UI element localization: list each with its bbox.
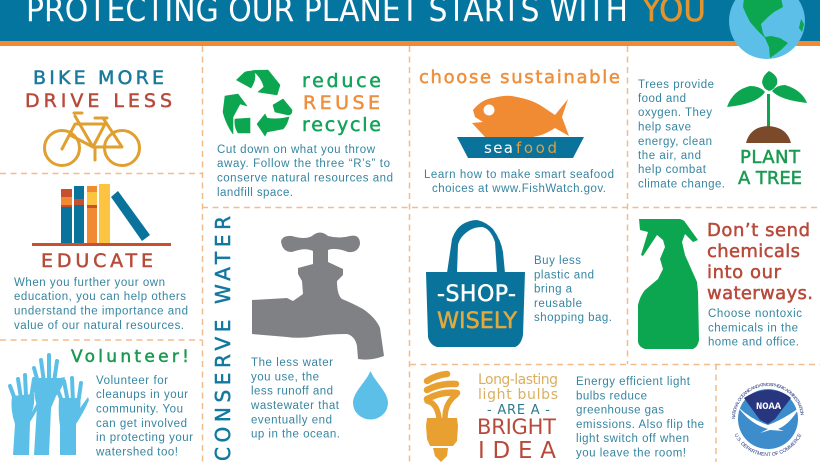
- logo: NOAA: [732, 382, 804, 456]
- text block: volunteer: in protecting your: [96, 432, 193, 444]
- text block: education: value of our natural resources.: [14, 320, 184, 332]
- heading: plant a tree: [738, 147, 802, 189]
- panel: choose sustainable seafood: [419, 67, 620, 195]
- text block: trees: help combat: [638, 164, 707, 176]
- heading: bright idea: [477, 372, 558, 462]
- text block: water: less runoff and: [251, 386, 333, 398]
- text block: water: you use, the: [251, 372, 319, 384]
- text block: volunteer: watershed too!: [95, 446, 178, 458]
- heading: educate: EDUCATE: [41, 250, 153, 272]
- text block: education: When you further your own: [14, 277, 165, 289]
- icon: seedling: [727, 71, 807, 143]
- text block: trees: the air, and: [638, 150, 701, 162]
- heading: plant a tree: PLANT: [740, 147, 801, 168]
- panel: volunteer: [10, 347, 193, 458]
- icon: books on shelf: [32, 184, 171, 246]
- heading: bright idea: - ARE A -: [487, 403, 550, 418]
- text block: seafood: Learn how to make smart seafood: [424, 169, 614, 181]
- text block: chemicals: Choose nontoxic: [708, 308, 802, 320]
- text block: seafood: [424, 169, 614, 195]
- panel: chemicals: [638, 219, 813, 349]
- icon: seafood tray: [457, 137, 584, 158]
- text block: recycling: landfill space.: [217, 187, 293, 199]
- text block: water: The less water: [251, 357, 333, 369]
- text block: shopping: plastic and: [534, 270, 594, 282]
- heading: plant a tree: A TREE: [738, 168, 802, 189]
- text block: volunteer: cleanups in your: [96, 389, 188, 401]
- text block: shopping: [534, 255, 612, 324]
- panel: conserve water: [211, 216, 388, 461]
- icon: recycle arrows: [223, 70, 292, 136]
- heading: drive less: DRIVE LESS: [25, 90, 172, 112]
- text block: recycling: Cut down on what you throw: [217, 144, 376, 156]
- icon: fish: [472, 96, 569, 137]
- text block: energy: emissions. Also flip the: [576, 419, 704, 431]
- logo: NOAA: NATIONAL OCEANIC AND ATMOSPHERIC ADMINISTRATION: [732, 382, 804, 419]
- heading: chemicals: Don’t send: [707, 220, 810, 241]
- heading: chemicals: into our: [707, 262, 782, 283]
- heading: reuse: REUSE: [303, 92, 380, 114]
- label: shop: -SHOP-: [437, 282, 516, 307]
- heading: volunteer: Volunteer!: [71, 347, 189, 367]
- text block: recycling: conserve natural resources and: [217, 172, 393, 184]
- panel: plant a tree: [638, 71, 807, 190]
- text block: energy: Energy efficient light: [576, 376, 691, 388]
- icon: spray bottle: [638, 219, 699, 349]
- text block: recycling: [217, 144, 393, 199]
- text block: seafood: choices at www.FishWatch.gov.: [432, 183, 606, 195]
- text block: shopping: shopping bag.: [534, 312, 612, 324]
- text block: water: [250, 357, 340, 440]
- text block: energy: light switch off when: [576, 433, 689, 445]
- heading: bright idea: BRIGHT: [477, 415, 556, 439]
- heading: bright idea: light bulbs: [478, 387, 558, 403]
- panel: bright idea: [426, 372, 704, 462]
- text block: trees: Trees provide: [638, 79, 714, 91]
- icon: seafood tray: food: [516, 139, 557, 157]
- text block: energy: greenhouse gas: [576, 404, 664, 416]
- label: wisely: WISELY: [437, 309, 518, 334]
- icon: faucet: [252, 232, 384, 360]
- text block: chemicals: chemicals in the: [708, 322, 798, 334]
- panel: reduce reuse recycle: [217, 70, 393, 199]
- text block: trees: climate change.: [638, 178, 725, 190]
- text block: education: understand the importance and: [14, 306, 188, 318]
- text block: volunteer: community. You: [96, 404, 183, 416]
- icon: globe: [729, 0, 805, 59]
- text block: shopping: Buy less: [534, 255, 581, 267]
- heading: chemicals: [707, 220, 813, 304]
- panel: shop wisely: [426, 220, 612, 347]
- logo: NOAA: U.S. DEPARTMENT OF COMMERCE: [734, 433, 802, 456]
- text block: shopping: bring a: [534, 284, 573, 296]
- text block: water: up in the ocean.: [251, 428, 340, 440]
- text block: trees: help save: [638, 122, 691, 134]
- icon: bicycle: [44, 113, 140, 166]
- text block: chemicals: [708, 308, 802, 348]
- text block: trees: energy, clean: [638, 136, 712, 148]
- panel: educate: [14, 184, 188, 332]
- header banner: [0, 0, 820, 59]
- text block: trees: food and: [638, 93, 686, 105]
- icon: water drop: [353, 371, 388, 420]
- icon: light bulb: [426, 374, 458, 462]
- text block: trees: [638, 79, 725, 190]
- text block: volunteer: Volunteer for: [96, 375, 168, 387]
- heading: recycle: recycle: [302, 114, 381, 136]
- panel: bike more drive less: [25, 67, 172, 166]
- text block: water: eventually end: [251, 414, 332, 426]
- heading: conserve water: CONSERVE WATER: [211, 216, 235, 461]
- icon: tote bag: [426, 220, 525, 347]
- text block: chemicals: home and office.: [708, 336, 799, 348]
- heading: choose sustainable: choose sustainable: [419, 67, 620, 88]
- text block: volunteer: [95, 375, 193, 458]
- text block: water: wastewater that: [250, 400, 340, 412]
- heading: bright idea: Long-lasting: [478, 372, 558, 388]
- heading: chemicals: waterways.: [707, 283, 813, 304]
- text block: education: [14, 277, 188, 332]
- text block: education: education, you can help others: [14, 291, 186, 303]
- text block: energy: you leave the room!: [576, 448, 686, 460]
- logo: NOAA: NOAA: [756, 401, 782, 413]
- heading: bike more: BIKE MORE: [33, 67, 164, 89]
- text block: energy: bulbs reduce: [576, 390, 647, 402]
- text block: recycling: away. Follow the three “R’s” to: [217, 158, 390, 170]
- heading: chemicals: chemicals: [707, 241, 800, 262]
- heading: reduce: reduce: [302, 70, 381, 92]
- text block: volunteer: can get involved: [96, 418, 187, 430]
- text block: energy: [576, 376, 704, 460]
- icon: raised hands: [10, 355, 89, 455]
- icon: seafood tray: sea: [484, 139, 513, 157]
- text block: shopping: reusable: [534, 298, 582, 310]
- text block: trees: oxygen. They: [638, 107, 712, 119]
